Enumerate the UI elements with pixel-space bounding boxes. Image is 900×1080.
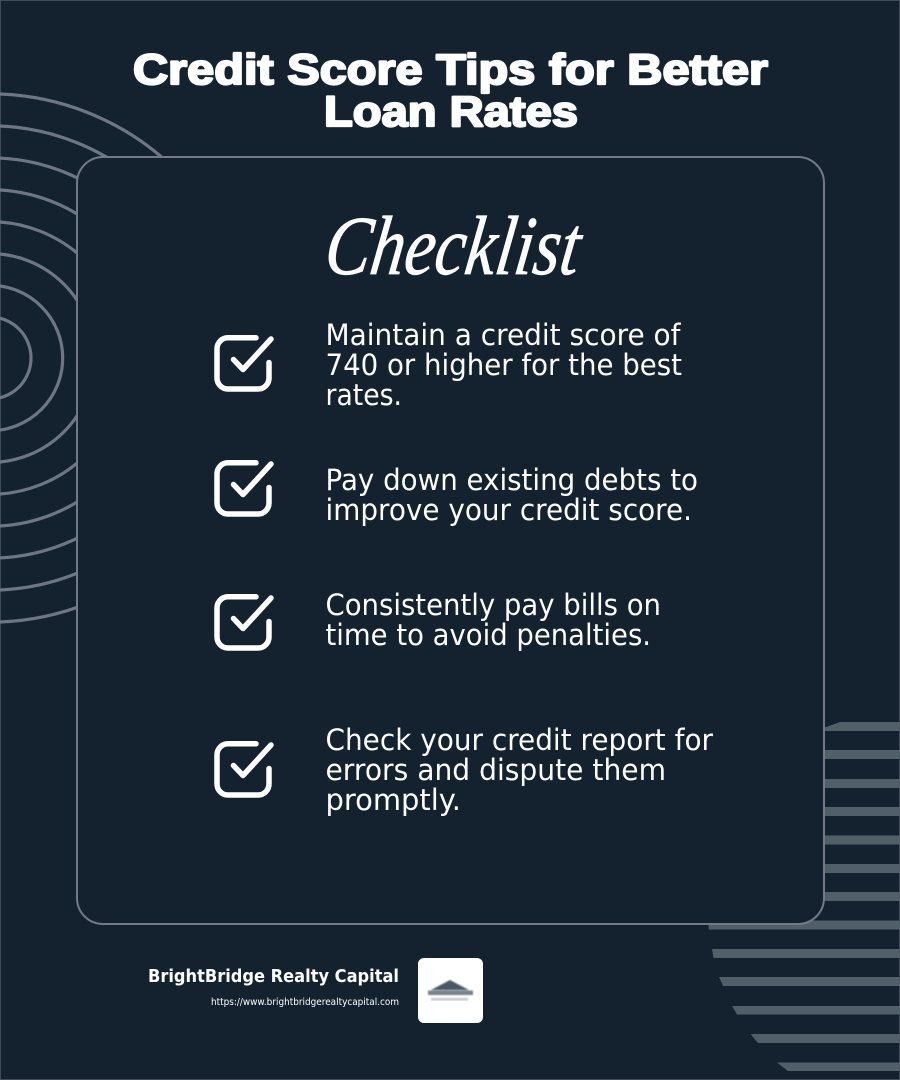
text: item 4: promptly.	[326, 783, 461, 817]
text: item 4: errors and dispute them	[326, 753, 666, 787]
decorative stripes	[708, 722, 900, 1071]
icon: checkbox 4	[217, 744, 271, 795]
icon: company logo	[418, 958, 483, 1023]
text: item 4	[326, 723, 713, 817]
title	[133, 46, 768, 136]
text: item 2	[326, 463, 698, 527]
text: item 3: Consistently pay bills on	[326, 588, 661, 622]
icon: checkbox 2	[217, 463, 271, 514]
text: item 1: 740 or higher for the best	[326, 348, 682, 382]
text: item 2: improve your credit score.	[326, 493, 692, 527]
text: item 1	[326, 318, 682, 412]
decorative concentric arcs	[0, 94, 254, 622]
title: Loan Rates	[324, 88, 578, 136]
title: Credit Score Tips for Better	[133, 46, 768, 94]
panel: checklist card	[77, 157, 824, 924]
text: item 3	[326, 588, 661, 652]
text: item 4: Check your credit report for	[326, 723, 713, 757]
text: item 1: Maintain a credit score of	[326, 318, 681, 352]
icon: checkbox 3	[217, 597, 271, 648]
text: item 2: Pay down existing debts to	[326, 463, 698, 497]
footer: company name: BrightBridge Realty Capital	[148, 966, 399, 987]
text: item 3: time to avoid penalties.	[326, 618, 651, 652]
text: item 1: rates.	[326, 378, 402, 412]
heading: Checklist: Checklist	[320, 200, 589, 293]
footer: website url: https://www.brightbridgerealtycapital.com	[211, 997, 399, 1008]
icon: checkbox 1	[217, 338, 271, 389]
